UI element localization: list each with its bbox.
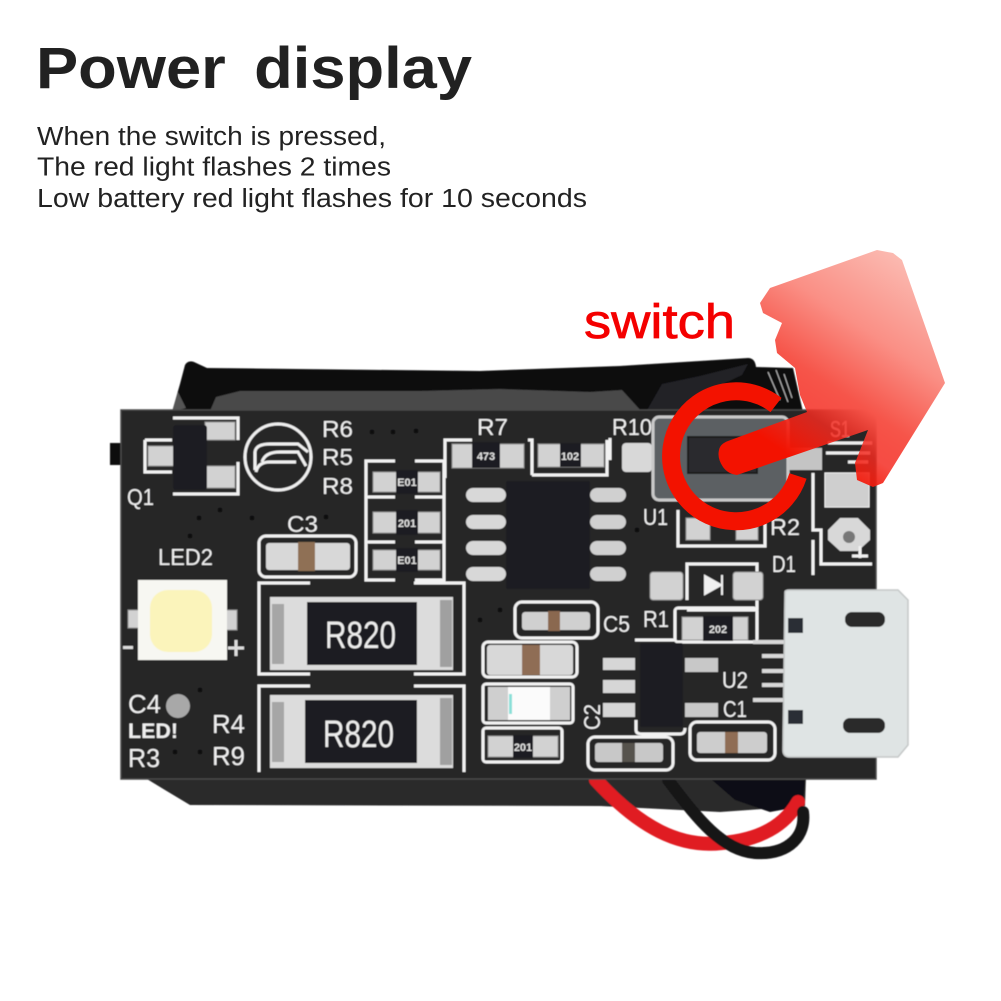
switch right pad — [786, 448, 822, 470]
metal ends bottom — [270, 695, 453, 768]
C5 body — [522, 612, 590, 630]
C1 label: C1 — [723, 696, 747, 722]
battery pack — [110, 358, 806, 812]
body — [488, 687, 570, 720]
C5 silk — [515, 602, 598, 638]
right edge pads and S1 label — [813, 416, 872, 575]
wires — [596, 780, 805, 853]
current sense resistor top — [259, 583, 464, 674]
current sense resistor bottom — [259, 686, 464, 772]
R1 pads — [682, 617, 748, 640]
R1 label: R1 — [643, 606, 669, 632]
lower left labels — [128, 689, 245, 773]
main chip U1 — [466, 481, 668, 589]
body — [487, 645, 573, 675]
U1 pads right — [590, 488, 626, 581]
minus sign — [123, 646, 133, 649]
plus sign — [228, 640, 244, 656]
resistor R1 202 — [643, 606, 757, 642]
U2 left pads — [603, 658, 635, 717]
D1 symbol — [705, 575, 722, 595]
body — [513, 735, 533, 758]
switch label: switch — [584, 296, 735, 349]
USB upper slot — [845, 612, 885, 627]
R2 pad left — [686, 518, 710, 540]
silk — [483, 642, 577, 677]
transistor Q1 — [127, 418, 238, 510]
battery wrinkles — [768, 370, 792, 402]
red ring highlight — [671, 391, 798, 521]
silk — [483, 728, 562, 762]
chip U2 — [579, 640, 748, 734]
USB pins — [753, 640, 788, 702]
D1 label: D1 — [772, 551, 796, 577]
C3 label: C3 — [287, 511, 318, 537]
S1 label: S1 — [830, 416, 850, 442]
pad shadow — [843, 531, 855, 543]
resistor trio — [366, 461, 444, 580]
R7 silk — [445, 438, 610, 478]
S1 marks — [826, 443, 872, 462]
R9: R9 — [212, 741, 245, 771]
body — [697, 732, 767, 753]
PCB board — [121, 410, 876, 779]
body — [595, 743, 663, 762]
switch button — [688, 437, 757, 473]
silk — [483, 684, 573, 723]
tactile switch — [622, 417, 822, 500]
battery top wrap — [172, 358, 803, 412]
U1 body — [506, 481, 590, 589]
R6: R6 — [322, 416, 353, 442]
resistor trio: 201 — [398, 518, 416, 530]
lower chips area — [483, 510, 800, 770]
capacitor C2 — [588, 737, 673, 770]
LED1: LED! — [128, 720, 178, 743]
logo circle — [245, 424, 311, 490]
marking top: R820 — [325, 615, 396, 657]
LED2 label: LED2 — [158, 544, 213, 570]
C5 label: C5 — [603, 611, 630, 637]
LED2 pads — [128, 610, 142, 628]
R1 silk — [675, 608, 757, 642]
C3 silk — [259, 536, 356, 577]
upper square pad — [825, 473, 869, 507]
LED2 white case — [138, 580, 227, 660]
silk frame bottom — [259, 686, 464, 772]
resistor 102 — [538, 444, 604, 467]
capacitor C1 — [690, 722, 775, 760]
U1 pads left — [466, 488, 506, 581]
diode D1 — [650, 551, 796, 610]
silk — [588, 737, 673, 770]
line 1: When the switch is pressed, — [37, 123, 386, 151]
R2 area — [678, 510, 800, 546]
capacitor C3 — [259, 511, 356, 577]
battery bottom body — [142, 776, 806, 812]
battery left sliver — [172, 392, 186, 412]
red wire — [596, 780, 798, 844]
marking: 201 — [514, 742, 532, 754]
Q1 silk — [145, 418, 238, 494]
R2 silk — [678, 510, 765, 546]
R5: R5 — [322, 444, 353, 470]
Q1 pads — [148, 446, 176, 466]
LED2 — [123, 544, 244, 660]
D1 left pad — [650, 572, 683, 600]
module photo illustration — [110, 358, 908, 853]
micro USB connector — [753, 590, 908, 757]
board vias — [172, 428, 640, 754]
C2 label: C2 — [579, 704, 605, 730]
D1 right pad — [733, 572, 763, 600]
R1 body — [703, 616, 733, 641]
switch case — [653, 417, 788, 500]
R1 marking: 202 — [709, 624, 727, 636]
R2 pad right — [736, 518, 758, 540]
top resistors R7 and R10: 102 — [561, 451, 579, 463]
R2 label: R2 — [770, 514, 800, 540]
R10 label: R10 — [612, 414, 652, 440]
resistor trio: E01 — [397, 477, 417, 489]
capacitor C5 — [515, 602, 630, 638]
resistor 201 lower — [483, 728, 562, 762]
silk frame top — [259, 583, 464, 674]
pads — [488, 736, 558, 757]
via — [166, 694, 190, 718]
R10 pad — [622, 443, 652, 472]
wire junction — [712, 780, 805, 812]
black body top — [307, 602, 417, 665]
USB side tabs — [788, 618, 803, 633]
black wire — [668, 780, 803, 853]
battery gloss — [646, 364, 748, 412]
U2 body — [640, 643, 683, 727]
C4: C4 — [128, 689, 161, 719]
R4: R4 — [212, 709, 245, 739]
USB lower slot — [843, 718, 885, 733]
trio silk — [366, 461, 444, 580]
resistor E01 top — [373, 472, 440, 492]
line 3: Low battery red light flashes for 10 seconds — [37, 185, 587, 213]
R7 label: R7 — [477, 414, 508, 440]
R3: R3 — [128, 743, 160, 773]
marking bottom: R820 — [323, 714, 394, 756]
Q1 body — [173, 425, 207, 490]
C3 body — [266, 543, 350, 570]
description text — [37, 123, 587, 213]
U2 right pads — [685, 658, 718, 717]
U1 label: U1 — [643, 504, 668, 530]
silk frame — [813, 473, 872, 575]
resistor 201 — [373, 512, 440, 533]
LED2 yellow lens — [150, 590, 212, 652]
left tab — [110, 443, 124, 465]
top resistors R7 and R10 — [445, 414, 652, 478]
silk — [690, 722, 775, 760]
pointing hand icon — [718, 250, 945, 487]
title: Power display — [36, 36, 472, 101]
D1 silk — [687, 564, 757, 610]
Q1 label: Q1 — [127, 484, 154, 510]
U2 label: U2 — [722, 667, 748, 693]
battery grey face — [210, 389, 642, 412]
lower round pad — [828, 518, 870, 551]
metal ends top — [270, 597, 453, 670]
plus mark — [852, 546, 868, 558]
resistor E01 bottom — [373, 550, 440, 570]
R8: R8 — [322, 473, 353, 499]
USB shell — [783, 590, 908, 757]
top resistors R7 and R10: 473 — [477, 451, 495, 463]
line 2: The red light flashes 2 times — [37, 154, 391, 182]
resistor trio: E01 — [397, 555, 417, 567]
resistor 473 — [452, 444, 524, 468]
U2 silk — [635, 640, 685, 734]
small white LED — [483, 684, 573, 723]
labels R6 R5 R8 — [322, 416, 353, 499]
black body bottom — [305, 700, 417, 763]
large capacitor — [483, 642, 577, 677]
